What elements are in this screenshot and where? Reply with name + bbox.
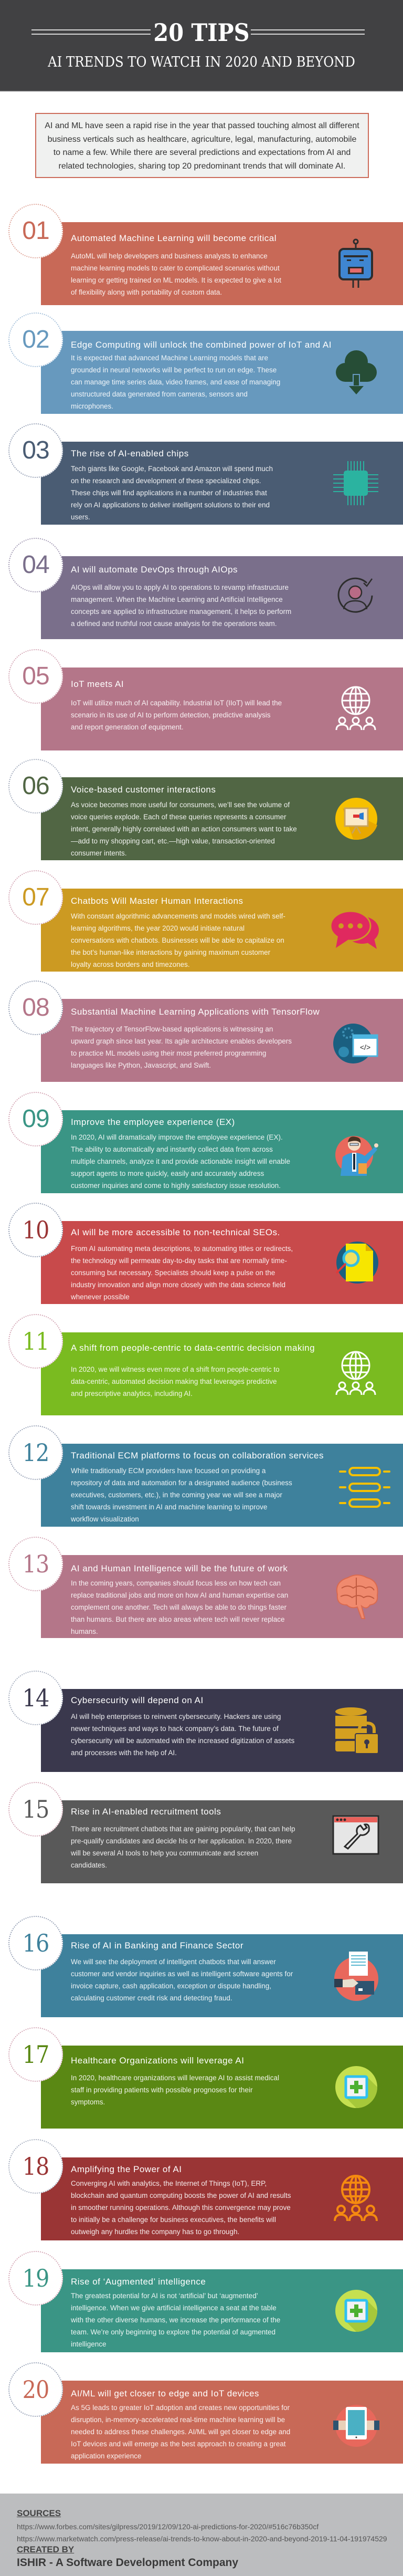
number 14: 14 (23, 1684, 49, 1712)
item 10 (8, 1203, 403, 1304)
panel 04 (41, 556, 403, 639)
item 01 (8, 204, 403, 305)
panel 16 (41, 1934, 403, 2017)
body 14: cybersecurity will be automated with the increased digitization of assets (71, 1737, 294, 1745)
body 01: machine learning models to cater to complicated scenarios without (71, 264, 280, 272)
number 03 (8, 423, 63, 478)
item 14 (8, 1671, 403, 1772)
item 06 (8, 759, 403, 860)
body 03: rely on AI applications to deliver intelligent solutions to their end (71, 501, 270, 509)
intro text box: to name a few. While there are several predictions and expectations from AI and (54, 148, 351, 157)
icon: orange globe with people (332, 2173, 379, 2225)
title 12: Traditional ECM platforms to focus on collaboration services (71, 1451, 324, 1461)
creator name: ISHIR - A Software Development Company (17, 2557, 238, 2569)
item 07 (8, 870, 403, 972)
number 09: 09 (22, 1105, 49, 1133)
item 04 (8, 538, 403, 639)
panel 18 (41, 2157, 403, 2240)
panel 11 (41, 1332, 403, 1415)
body 19: intelligence. When we give artificial intelligence a seat at the table (71, 2304, 277, 2312)
icon: tablet in hands (332, 2400, 379, 2452)
body 10: whenever possible (71, 1293, 130, 1301)
body 20: disruption, in-memory-accelerated real-time machine learning will be (71, 2416, 285, 2424)
number 08 (8, 981, 63, 1035)
body 20: IoT devices and will emerge as the best approach to creating a great (71, 2440, 285, 2448)
body 19 (71, 2290, 280, 2350)
body 01: learning or getting trained on ML models. It is expected to give a lot (71, 276, 281, 284)
title: 20 TIPS (153, 18, 250, 47)
body 17: staff in providing patients with possible prognoses for their (71, 2086, 252, 2094)
body 19: The greatest potential for AI is not ‘artificial’ but ‘augmented’ (71, 2292, 258, 2300)
body 20: application experience (71, 2452, 141, 2460)
body 13: complement one another. Tech will always be able to do things faster (71, 1603, 287, 1611)
panel 14 (41, 1689, 403, 1772)
created by heading: CREATED BY (17, 2544, 74, 2554)
item 12 (8, 1425, 403, 1527)
body 05: IoT will utilize much of AI capability. Industrial IoT (IIoT) will lead the (71, 699, 282, 707)
title 06: Voice-based customer interactions (71, 785, 216, 795)
item 09 (8, 1092, 403, 1193)
body 06: —add to my shopping cart, etc.—high value, transaction-oriented (71, 837, 275, 845)
body 01: AutoML will help developers and business analysts to enhance (71, 252, 268, 260)
item 19 (0, 2251, 403, 2352)
number 17: 17 (23, 2040, 49, 2069)
intro text box: business verticals such as healthcare, agriculture, legal, manufacturing, automobile (48, 135, 356, 144)
body 14: and processes with the help of AI. (71, 1749, 177, 1757)
icon: medical box (332, 2061, 379, 2113)
panel 17 (41, 2046, 403, 2129)
body 01: of flexibility along with portability of custom data. (71, 288, 222, 296)
body 15: There are recruitment chatbots that are gaining popularity, that can help (71, 1825, 295, 1833)
number 04 (8, 538, 63, 592)
body 09: In 2020, AI will dramatically improve the employee experience (EX). (71, 1133, 283, 1141)
icon: database lock (332, 1704, 379, 1757)
title 19: Rise of ‘Augmented’ intelligence (71, 2277, 206, 2287)
body 16: We will see the deployment of intelligent chatbots that will answer (71, 1958, 276, 1966)
body 10: From AI automating meta descriptions, to automating titles or redirects, (71, 1245, 293, 1253)
body 08 (71, 1025, 292, 1069)
title 08: Substantial Machine Learning Applications with TensorFlow (71, 1007, 320, 1017)
panel 10 (41, 1221, 403, 1304)
icon: code window with gears: </> (360, 1043, 370, 1051)
body 17: In 2020, healthcare organizations will leverage AI to assist medical (71, 2074, 279, 2082)
body 18: blockchain and quantum computing boosts the power of AI and results (71, 2192, 291, 2199)
body 05: scenario in its use of AI to perform detection, predictive analysis (71, 711, 270, 719)
number 06 (8, 759, 63, 814)
body 12: shift towards investment in AI and machine learning to improve (71, 1503, 267, 1511)
number 10 (8, 1203, 63, 1257)
source links: https://www.marketwatch.com/press-release/ai-trends-to-know-about-in-2020-and-beyond-2019-11-04-191974529 (17, 2535, 387, 2543)
icon: document magnifier (336, 1242, 378, 1284)
body 10 (71, 1245, 293, 1301)
number 09 (8, 1092, 63, 1146)
number 01: 01 (22, 217, 49, 245)
icon: medical box (332, 2285, 379, 2337)
body 09: The ability to automatically and instantly collect data from across (71, 1145, 273, 1153)
number 11: 11 (23, 1327, 49, 1355)
number 20: 20 (23, 2375, 49, 2404)
body 05 (71, 699, 282, 731)
number 20 (8, 2362, 63, 2417)
source links (17, 2521, 387, 2545)
body 19: intelligence (71, 2340, 107, 2348)
number 03: 03 (22, 436, 49, 464)
body 12: While traditionally ECM providers have focused on providing a (71, 1467, 266, 1475)
title 13: AI and Human Intelligence will be the future of work (71, 1563, 288, 1573)
title 14: Cybersecurity will depend on AI (71, 1695, 204, 1705)
body 14 (71, 1711, 294, 1759)
body 14: newer techniques and ways to hack company’s data. The future of (71, 1725, 279, 1733)
body 12: executives, customers, etc.), in the coming year we will see a major (71, 1491, 282, 1499)
body 08: languages like Python, Javascript, and Swift. (71, 1061, 211, 1069)
body 02 (71, 354, 280, 410)
body 18: to initially be a challenge for business executives, the benefits will (71, 2216, 276, 2224)
body 02: It is expected that advanced Machine Learning models that are (71, 354, 268, 362)
body 16: customer and vendor inquiries as well as intelligent software agents for (71, 1970, 293, 1978)
title 01: Automated Machine Learning will become critical (71, 233, 277, 243)
title 17: Healthcare Organizations will leverage AI (71, 2056, 244, 2066)
title 07: Chatbots Will Master Human Interactions (71, 896, 243, 906)
item 18 (0, 2139, 403, 2240)
body 04: concepts are applied to infrastructure management, it helps to perform (71, 608, 291, 616)
body 02: microphones. (71, 402, 113, 410)
number 05 (8, 649, 63, 704)
intro text box: related technologies, sharing top 20 predominant trends that will dominate AI. (59, 162, 345, 171)
number 17 (8, 2027, 63, 2082)
body 06: As voice becomes more useful for consumers, we’ll see the volume of (71, 801, 290, 809)
body 10: industry innovation and align more closely with the data science field (71, 1281, 285, 1289)
body 06: voice queries explode. Each of these queries represents a consumer (71, 813, 286, 821)
title 02: Edge Computing will unlock the combined power of IoT and AI (71, 340, 332, 350)
body 04 (71, 583, 291, 628)
intro text box: AI and ML have seen a rapid rise in the year that passed touching almost all different (45, 121, 359, 130)
item 08 (8, 981, 403, 1082)
icon: person check (338, 578, 373, 613)
body 13: replace traditional jobs and more on how AI and human expertise can (71, 1591, 288, 1599)
body 11 (71, 1365, 280, 1397)
body 09: support agents to more quickly, easily and accurately address (71, 1170, 264, 1177)
body 11: and prescriptive analytics, including AI. (71, 1390, 193, 1397)
footer (0, 2494, 403, 2576)
body 08: upward graph since last year. Its agile architecture enables developers (71, 1037, 292, 1045)
body 20: needed to address these challenges. AI/ML will get closer to edge and (71, 2428, 290, 2436)
panel 09 (41, 1110, 403, 1193)
item 16 (0, 1916, 403, 2017)
number 02 (8, 312, 63, 367)
item 17 (0, 2027, 403, 2129)
panel 20 (41, 2381, 403, 2464)
number 15: 15 (23, 1795, 49, 1823)
body 03: on the research and development of these specialized chips. (71, 477, 261, 485)
number 14 (8, 1671, 63, 1725)
body 17 (71, 2072, 279, 2108)
number 19: 19 (23, 2264, 49, 2292)
body 19: team. We’re only beginning to explore the potential of augmented (71, 2328, 275, 2336)
title 04: AI will automate DevOps through AIOps (71, 565, 238, 575)
item 13 (8, 1537, 403, 1638)
icon: chip (333, 461, 378, 505)
number 10: 10 (23, 1216, 49, 1244)
panel 08 (41, 999, 403, 1082)
body 11: data-centric, automated decision making that leverages predictive (71, 1378, 277, 1385)
item 03 (8, 423, 403, 525)
item 20 (0, 2362, 403, 2464)
title 18: Amplifying the Power of AI (71, 2164, 182, 2174)
number 18 (8, 2139, 63, 2194)
panel 06 (41, 777, 403, 860)
item 15 (0, 1782, 403, 1883)
body 03: Tech giants like Google, Facebook and Amazon will spend much (71, 465, 273, 473)
number 19 (8, 2251, 63, 2306)
icon: receipt and card (332, 1949, 379, 2002)
body 02: can manage time series data, video frames, and ease of managing (71, 378, 280, 386)
number 07: 07 (22, 883, 49, 911)
number 13 (8, 1537, 63, 1591)
body 16: invoice capture, cash application, exception or dispute handling, (71, 1982, 271, 1990)
icon: workflow bars (339, 1467, 390, 1508)
body 07 (71, 912, 285, 968)
body 19: with the other diverse humans, we increase the performance of the (71, 2316, 280, 2324)
number 05: 05 (22, 662, 49, 690)
title 03: The rise of AI-enabled chips (71, 449, 189, 458)
title 16: Rise of AI in Banking and Finance Sector (71, 1941, 243, 1951)
body 03: users. (71, 513, 90, 521)
number 16: 16 (23, 1929, 49, 1957)
body 13: than humans. But there are also areas where tech will never replace (71, 1615, 284, 1623)
body 04: a defined and truthful root cause analysis for the operations team. (71, 620, 277, 628)
body 12: repository of data and automation for a designated audience (business (71, 1479, 292, 1487)
panel 05 (41, 668, 403, 750)
body 02: grounded in neural networks will be perfect to run on edge. These (71, 366, 277, 374)
body 06: consumer intents. (71, 849, 127, 857)
body 15: pre-qualify candidates and decide his or her application. In 2020, there (71, 1837, 292, 1845)
icon: code window with gears (333, 1024, 378, 1063)
body 18: in smoother running operations. Although this convergence may prove (71, 2204, 291, 2212)
title 05: IoT meets AI (71, 679, 124, 689)
number 06: 06 (22, 772, 49, 800)
body 15: candidates. (71, 1861, 107, 1869)
title 09: Improve the employee experience (EX) (71, 1117, 235, 1127)
panel 19 (41, 2269, 403, 2352)
body 07: conversations with chatbots. Businesses will be able to capitalize on (71, 936, 284, 944)
number 15 (8, 1782, 63, 1837)
body 08: to practice ML models using their most preferred programming (71, 1049, 266, 1057)
body 03 (71, 465, 273, 521)
body 05: and report generation of equipment. (71, 723, 184, 731)
body 03: These chips will find applications in a number of industries that (71, 489, 267, 497)
body 09 (71, 1133, 290, 1190)
title 10: AI will be more accessible to non-technical SEOs. (71, 1227, 280, 1237)
icon: brain (336, 1574, 378, 1619)
body 10: consuming but necessary. Specialists should keep a pulse on the (71, 1269, 275, 1277)
number 04: 04 (22, 551, 49, 579)
body 07: the bot’s human-like interactions by gaining maximum customer (71, 948, 270, 956)
title 15: Rise in AI-enabled recruitment tools (71, 1807, 221, 1817)
icon: businessman (335, 1136, 378, 1176)
icon: globe with people (336, 686, 376, 730)
icon: robot (338, 238, 373, 288)
icon: browser wrench (332, 1809, 379, 1861)
body 18 (71, 2177, 291, 2238)
panel 13 (41, 1555, 403, 1638)
body 09: multiple channels, analyze it and provide actionable insight will enable (71, 1157, 290, 1165)
body 07: loyalty across borders and timezones. (71, 961, 190, 968)
body 20 (71, 2402, 290, 2462)
panel 12 (41, 1444, 403, 1527)
body 20: As 5G leads to greater IoT adoption and creates new opportunities for (71, 2404, 290, 2412)
body 13: In the coming years, companies should focus less on how tech can (71, 1579, 281, 1587)
body 15 (71, 1823, 295, 1871)
body 06: intent, generally highly correlated with an action consumers want to take (71, 825, 297, 833)
body 01 (71, 252, 281, 296)
body 06 (71, 801, 297, 857)
icon: globe with people (336, 1351, 376, 1395)
body 04: AIOps will allow you to apply AI to operations to revamp infrastructure (71, 583, 289, 591)
intro text box (35, 113, 369, 178)
body 16: calculating customer credit risk and detecting fraud. (71, 1994, 232, 2002)
body 08: The trajectory of TensorFlow-based applications is witnessing an (71, 1025, 273, 1033)
subtitle: AI TRENDS TO WATCH IN 2020 AND BEYOND (48, 54, 355, 70)
body 13 (71, 1579, 288, 1635)
number 16 (8, 1916, 63, 1970)
body 13: humans. (71, 1628, 98, 1635)
body 07: learning algorithms, the year 2020 would initiate natural (71, 924, 245, 932)
body 18: outweigh any hurdles the company has to go through. (71, 2228, 239, 2236)
item 02 (8, 312, 403, 414)
icon: cloud download (336, 350, 377, 394)
body 10: the technology will permeate day-to-day tasks that are normally time- (71, 1257, 287, 1265)
body 15: will be several AI tools to help you communicate and screen (71, 1849, 258, 1857)
panel 15 (41, 1800, 403, 1883)
number 01 (8, 204, 63, 258)
title 20: AI/ML will get closer to edge and IoT devices (71, 2389, 259, 2398)
panel 01 (41, 222, 403, 305)
title decorative lines right (251, 29, 365, 35)
title 11: A shift from people-centric to data-centric decision making (71, 1343, 315, 1353)
number 12: 12 (23, 1438, 49, 1467)
number 12 (8, 1425, 63, 1480)
body 17: symptoms. (71, 2098, 105, 2106)
number 07 (8, 870, 63, 925)
body 16 (71, 1956, 293, 2004)
body 02: unstructured data generated from cameras, sensors and (71, 390, 248, 398)
body 12 (71, 1467, 292, 1523)
number 13: 13 (23, 1550, 49, 1578)
sources heading: SOURCES (17, 2508, 61, 2518)
body 14: AI will help enterprises to reinvent cybersecurity. Hackers are using (71, 1713, 281, 1720)
title decorative lines left (31, 29, 151, 35)
item 05 (8, 649, 403, 750)
number 02: 02 (22, 326, 49, 353)
icon: chat bubbles (332, 912, 379, 949)
header (0, 0, 403, 91)
panel 02 (41, 331, 403, 414)
body 12: workflow visualization (71, 1515, 139, 1523)
panel 03 (41, 442, 403, 525)
number 11 (8, 1314, 63, 1369)
source links: https://www.forbes.com/sites/gilpress/2019/12/09/120-ai-predictions-for-2020/#516c76b350cf (17, 2522, 319, 2531)
body 04: management. When the Machine Learning and Artificial Intelligence (71, 596, 283, 603)
item 11 (8, 1314, 403, 1415)
panel 07 (41, 889, 403, 972)
number 08: 08 (22, 994, 49, 1021)
body 09: customer inquiries and come to highly satisfactory issue resolution. (71, 1182, 281, 1190)
body 18: Converging AI with analytics, the Internet of Things (IoT), ERP, (71, 2179, 267, 2187)
body 07: With constant algorithmic advancements and models wired with self- (71, 912, 285, 920)
number 18: 18 (23, 2152, 49, 2181)
body 11: In 2020, we will witness even more of a shift from people-centric to (71, 1365, 280, 1373)
icon: presentation easel (335, 798, 377, 840)
